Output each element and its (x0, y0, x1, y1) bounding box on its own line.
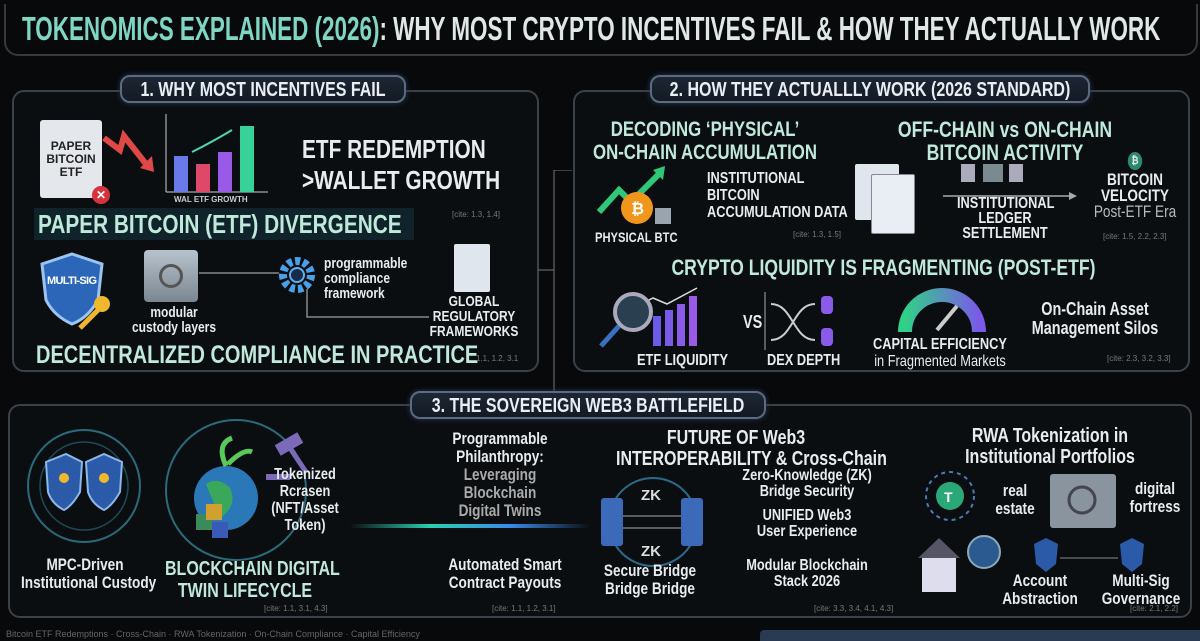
text: capital efficiency: CAPITAL EFFICIENCY (873, 336, 1007, 353)
heading: rwa tokenization: Institutional Portfolios (965, 446, 1135, 468)
text: programmable compliance: framework (324, 285, 385, 302)
text: etf redemption: >WALLET GROWTH (302, 165, 500, 195)
text: programmable philanthropy: Philanthropy: (456, 447, 544, 466)
list: web3 features: Modular Blockchain (746, 557, 868, 574)
bar chart (166, 114, 268, 202)
header: section 3: 3. THE SOVEREIGN WEB3 BATTLEFIELD (432, 395, 744, 417)
panel: how they work: [cite: 2.3, 3.2, 3.3] (1107, 354, 1171, 363)
heading: rwa tokenization: RWA Tokenization in (972, 425, 1128, 447)
panel: sovereign web3 battlefield (8, 404, 1192, 618)
icon: digital twin globe (165, 419, 308, 561)
icon: physical btc: ₿ (631, 200, 644, 218)
panel: how they work: SETTLEMENT (962, 225, 1048, 242)
panel: sovereign web3 battlefield: Secure Bridge (604, 561, 696, 580)
panel: how they work: DEX DEPTH (767, 352, 840, 369)
panel: sovereign web3 battlefield: Token) (284, 517, 326, 534)
icon: zk bridge: ZK (641, 543, 661, 560)
panel: why incentives fail: 1.1, 1.2, 3.1 (476, 354, 518, 363)
text: bitcoin velocity: ₿ (1131, 155, 1139, 167)
text: smart contract payouts (448, 555, 562, 592)
panel: sovereign web3 battlefield: Abstraction (1002, 589, 1078, 608)
text: institutional accumulation: INSTITUTIONAL (707, 170, 804, 187)
text: global regulatory: REGULATORY (433, 308, 515, 325)
icon: safe (144, 250, 198, 302)
icon: gear (279, 257, 315, 293)
icon: paper bitcoin etf: PAPER (51, 139, 91, 153)
icon: rwa assets: T (944, 489, 953, 505)
arrow: data stream (350, 524, 590, 528)
panel: sovereign web3 battlefield: [cite: 1.1, 3.1, 4.3] (264, 604, 328, 613)
heading: blockchain twin lifecycle: BLOCKCHAIN DIGITAL (165, 558, 340, 580)
heading: paper bitcoin divergence (34, 208, 414, 240)
text: modular custody layers: custody layers (132, 319, 216, 336)
icon: zk bridge (601, 477, 703, 567)
panel: sovereign web3 battlefield: Rcrasen (280, 483, 330, 500)
text: programmable philanthropy (452, 429, 548, 520)
text: programmable compliance: programmable (324, 255, 407, 272)
heading: decoding physical: ON-CHAIN ACCUMULATION (593, 141, 817, 164)
list: web3 features: UNIFIED Web3 (763, 507, 851, 524)
heading: decoding physical (593, 118, 817, 164)
panel: sovereign web3 battlefield: [cite: 2.1, 2.2] (1130, 604, 1178, 613)
text: mpc custody: Institutional Custody (21, 573, 156, 592)
connector lines (538, 170, 572, 391)
header: section 1: 1. WHY MOST INCENTIVES FAIL (140, 79, 386, 101)
heading: rwa tokenization (965, 425, 1135, 468)
panel: sovereign web3 battlefield: estate (995, 499, 1035, 518)
panel: sovereign web3 battlefield: Tokenized (274, 466, 336, 483)
icon: document (454, 244, 490, 292)
panel: sovereign web3 battlefield: Account (1013, 571, 1067, 590)
list: web3 features (742, 467, 872, 590)
icon: dex depth (764, 292, 833, 350)
panel: how they work: VS (743, 312, 762, 332)
panel: sovereign web3 battlefield: [cite: 1.1, 1.2, 3.1] (492, 604, 556, 613)
list: web3 features: Zero-Knowledge (ZK) (742, 467, 872, 484)
icon: zk bridge: ZK (641, 487, 661, 504)
text: etf redemption: ETF REDEMPTION (302, 134, 486, 164)
panel: sovereign web3 battlefield: fortress (1130, 497, 1180, 516)
panel: how they work: ETF LIQUIDITY (637, 352, 728, 369)
panel: sovereign web3 battlefield: Multi-Sig (1112, 571, 1170, 590)
heading: liquidity fragmenting: CRYPTO LIQUIDITY IS FRAGMENTING (POST-ETF) (671, 255, 1096, 280)
panel: sovereign web3 battlefield: Bridge Bridge (605, 579, 695, 598)
panel: how they work (573, 90, 1190, 372)
icon: rwa assets (918, 471, 1144, 592)
text: programmable philanthropy: Leveraging (464, 465, 536, 484)
title: TOKENOMICS EXPLAINED (2026): WHY MOST CRYPTO INCENTIVES FAIL & HOW THEY ACTUALLY WORK (22, 10, 1160, 47)
arrow: ledger settlement (943, 164, 1077, 200)
text: programmable compliance: compliance (324, 270, 390, 287)
heading: off-chain vs on-chain: OFF-CHAIN vs ON-CHAIN (898, 117, 1112, 142)
text: bitcoin velocity: BITCOIN (1107, 170, 1163, 189)
heading: future of web3: INTEROPERABILITY & Cross-Chain (616, 448, 887, 470)
list: web3 features: Bridge Security (760, 483, 854, 500)
panel: sovereign web3 battlefield: real (1003, 481, 1027, 500)
heading: blockchain twin lifecycle: TWIN LIFECYCLE (178, 580, 312, 602)
icon: ledgers (855, 164, 899, 220)
panel: how they work: LEDGER (978, 210, 1032, 227)
text: mpc custody: MPC-Driven (46, 555, 124, 574)
text: programmable compliance (324, 255, 407, 302)
footer text: Bitcoin ETF Redemptions · Cross-Chain · RWA Tokenization · On-Chain Compliance · Capital Efficiency (6, 629, 420, 639)
text: bitcoin velocity: VELOCITY (1101, 186, 1169, 205)
panel: why incentives fail (12, 90, 539, 372)
text: asset management silos (1032, 299, 1158, 338)
heading: decoding physical: DECODING ‘PHYSICAL’ (611, 118, 799, 141)
heading: off-chain vs on-chain (898, 117, 1112, 165)
heading: blockchain twin lifecycle (165, 558, 340, 602)
header: section 2: 2. HOW THEY ACTUALLLY WORK (2026 STANDARD) (670, 79, 1070, 101)
text: smart contract payouts: Contract Payouts (449, 573, 561, 592)
panel: sovereign web3 battlefield: (NFT/Asset (271, 500, 339, 517)
text: institutional accumulation (707, 170, 848, 221)
text: asset management silos: On-Chain Asset (1041, 299, 1149, 319)
panel: sovereign web3 battlefield: Governance (1102, 589, 1180, 608)
text: programmable philanthropy: Programmable (452, 429, 548, 448)
text: modular custody layers: modular (150, 304, 198, 321)
text: global regulatory (430, 293, 518, 340)
icon: paper bitcoin etf: ✕ (96, 188, 106, 202)
header: section 3 (410, 391, 766, 419)
header: section 1 (120, 75, 406, 103)
icon: mpc shields (27, 429, 141, 543)
panel: how they work: PHYSICAL BTC (595, 229, 678, 245)
text: programmable philanthropy: Digital Twins (459, 501, 541, 520)
list: web3 features: Stack 2026 (774, 573, 840, 590)
heading: future of web3: FUTURE OF Web3 (667, 427, 805, 449)
chart: etf liquidity (599, 287, 698, 348)
panel: why incentives fail: [cite: 1.3, 1.4] (452, 210, 500, 219)
icon: physical btc (596, 166, 671, 224)
text: modular custody layers (132, 304, 216, 336)
icon: paper bitcoin etf: ETF (60, 165, 82, 179)
text: asset management silos: Management Silos (1032, 318, 1158, 338)
text: global regulatory: FRAMEWORKS (430, 323, 518, 340)
connector (199, 272, 429, 318)
panel: sovereign web3 battlefield: [cite: 3.3, 3.4, 4.1, 4.3] (814, 604, 893, 613)
panel: how they work: [cite: 1.3, 1.5] (793, 230, 841, 239)
icon: paper bitcoin etf: BITCOIN (46, 152, 96, 166)
text: bitcoin velocity: Post-ETF Era (1094, 202, 1176, 221)
text: programmable philanthropy: Blockchain (464, 483, 536, 502)
text: institutional accumulation: ACCUMULATION DATA (707, 204, 848, 221)
panel: why incentives fail: PAPER BITCOIN (ETF) DIVERGENCE (38, 209, 402, 239)
icon: multi-sig shield (40, 252, 110, 330)
text: bitcoin velocity (1094, 152, 1176, 221)
icon: multi-sig shield: MULTI-SIG (47, 275, 97, 287)
heading: decentralized compliance: DECENTRALIZED COMPLIANCE IN PRACTICE (36, 341, 478, 369)
panel: how they work: INSTITUTIONAL (957, 195, 1054, 212)
icon: paper bitcoin etf (40, 120, 102, 198)
title (4, 4, 1198, 56)
footer bar (760, 630, 1200, 641)
text: mpc custody (21, 555, 156, 592)
text: institutional accumulation: BITCOIN (707, 187, 760, 204)
heading: future of web3 (616, 427, 887, 470)
list: web3 features: User Experience (757, 523, 857, 540)
icon: gauge (898, 288, 986, 332)
text: smart contract payouts: Automated Smart (448, 555, 562, 574)
text: capital efficiency: in Fragmented Markets (874, 353, 1006, 370)
text: capital efficiency (873, 336, 1007, 370)
text: etf redemption (302, 134, 500, 195)
heading: off-chain vs on-chain: BITCOIN ACTIVITY (927, 140, 1083, 165)
panel: how they work: [cite: 1.5, 2.2, 2.3] (1103, 232, 1167, 241)
text: global regulatory: GLOBAL (449, 293, 499, 310)
icon: down arrow (102, 130, 154, 172)
panel: sovereign web3 battlefield: digital (1135, 479, 1175, 498)
